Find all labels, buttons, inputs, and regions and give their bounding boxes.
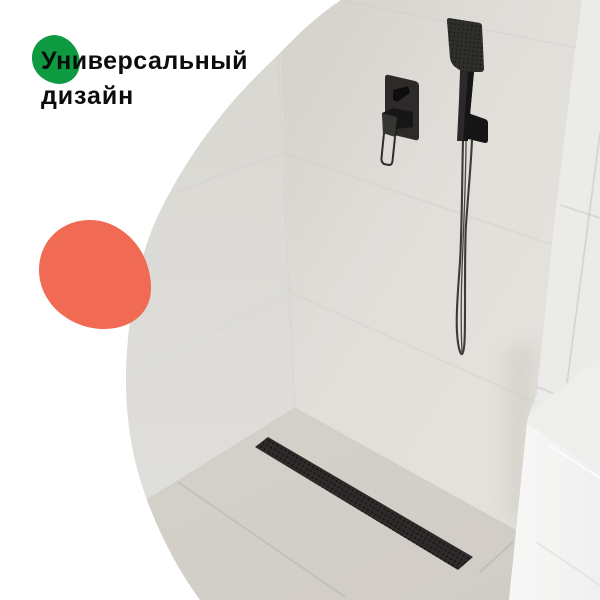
white cabinet: [509, 357, 600, 600]
white side wall tiles: [527, 0, 600, 420]
mixer plate: [385, 75, 419, 140]
icon: wall mixer: [381, 75, 419, 165]
title: [41, 47, 248, 110]
mixer lever body: [382, 108, 413, 137]
cabinet front: [509, 422, 600, 600]
hose: [457, 140, 472, 354]
title: дизайн: [41, 82, 134, 110]
decorative green blob: [32, 35, 80, 84]
mixer lever loop: [381, 133, 395, 165]
mixer switch: [393, 86, 410, 102]
wall holder: [468, 113, 488, 143]
handle: [457, 71, 474, 141]
cabinet top: [528, 357, 600, 472]
decorative coral blob: [39, 220, 151, 329]
icon: hand shower: [447, 18, 488, 354]
mixer lever face: [382, 113, 397, 137]
wall shadow near cabinet: [507, 348, 534, 518]
tile seams: [130, 0, 600, 597]
shower head: [447, 18, 484, 72]
icon: linear floor drain: [255, 437, 473, 570]
title: Универсальный: [41, 47, 248, 75]
right wall: [278, 0, 585, 545]
left wall: [126, 53, 295, 500]
cabinet drawer line: [536, 542, 600, 585]
floor: [147, 408, 516, 600]
